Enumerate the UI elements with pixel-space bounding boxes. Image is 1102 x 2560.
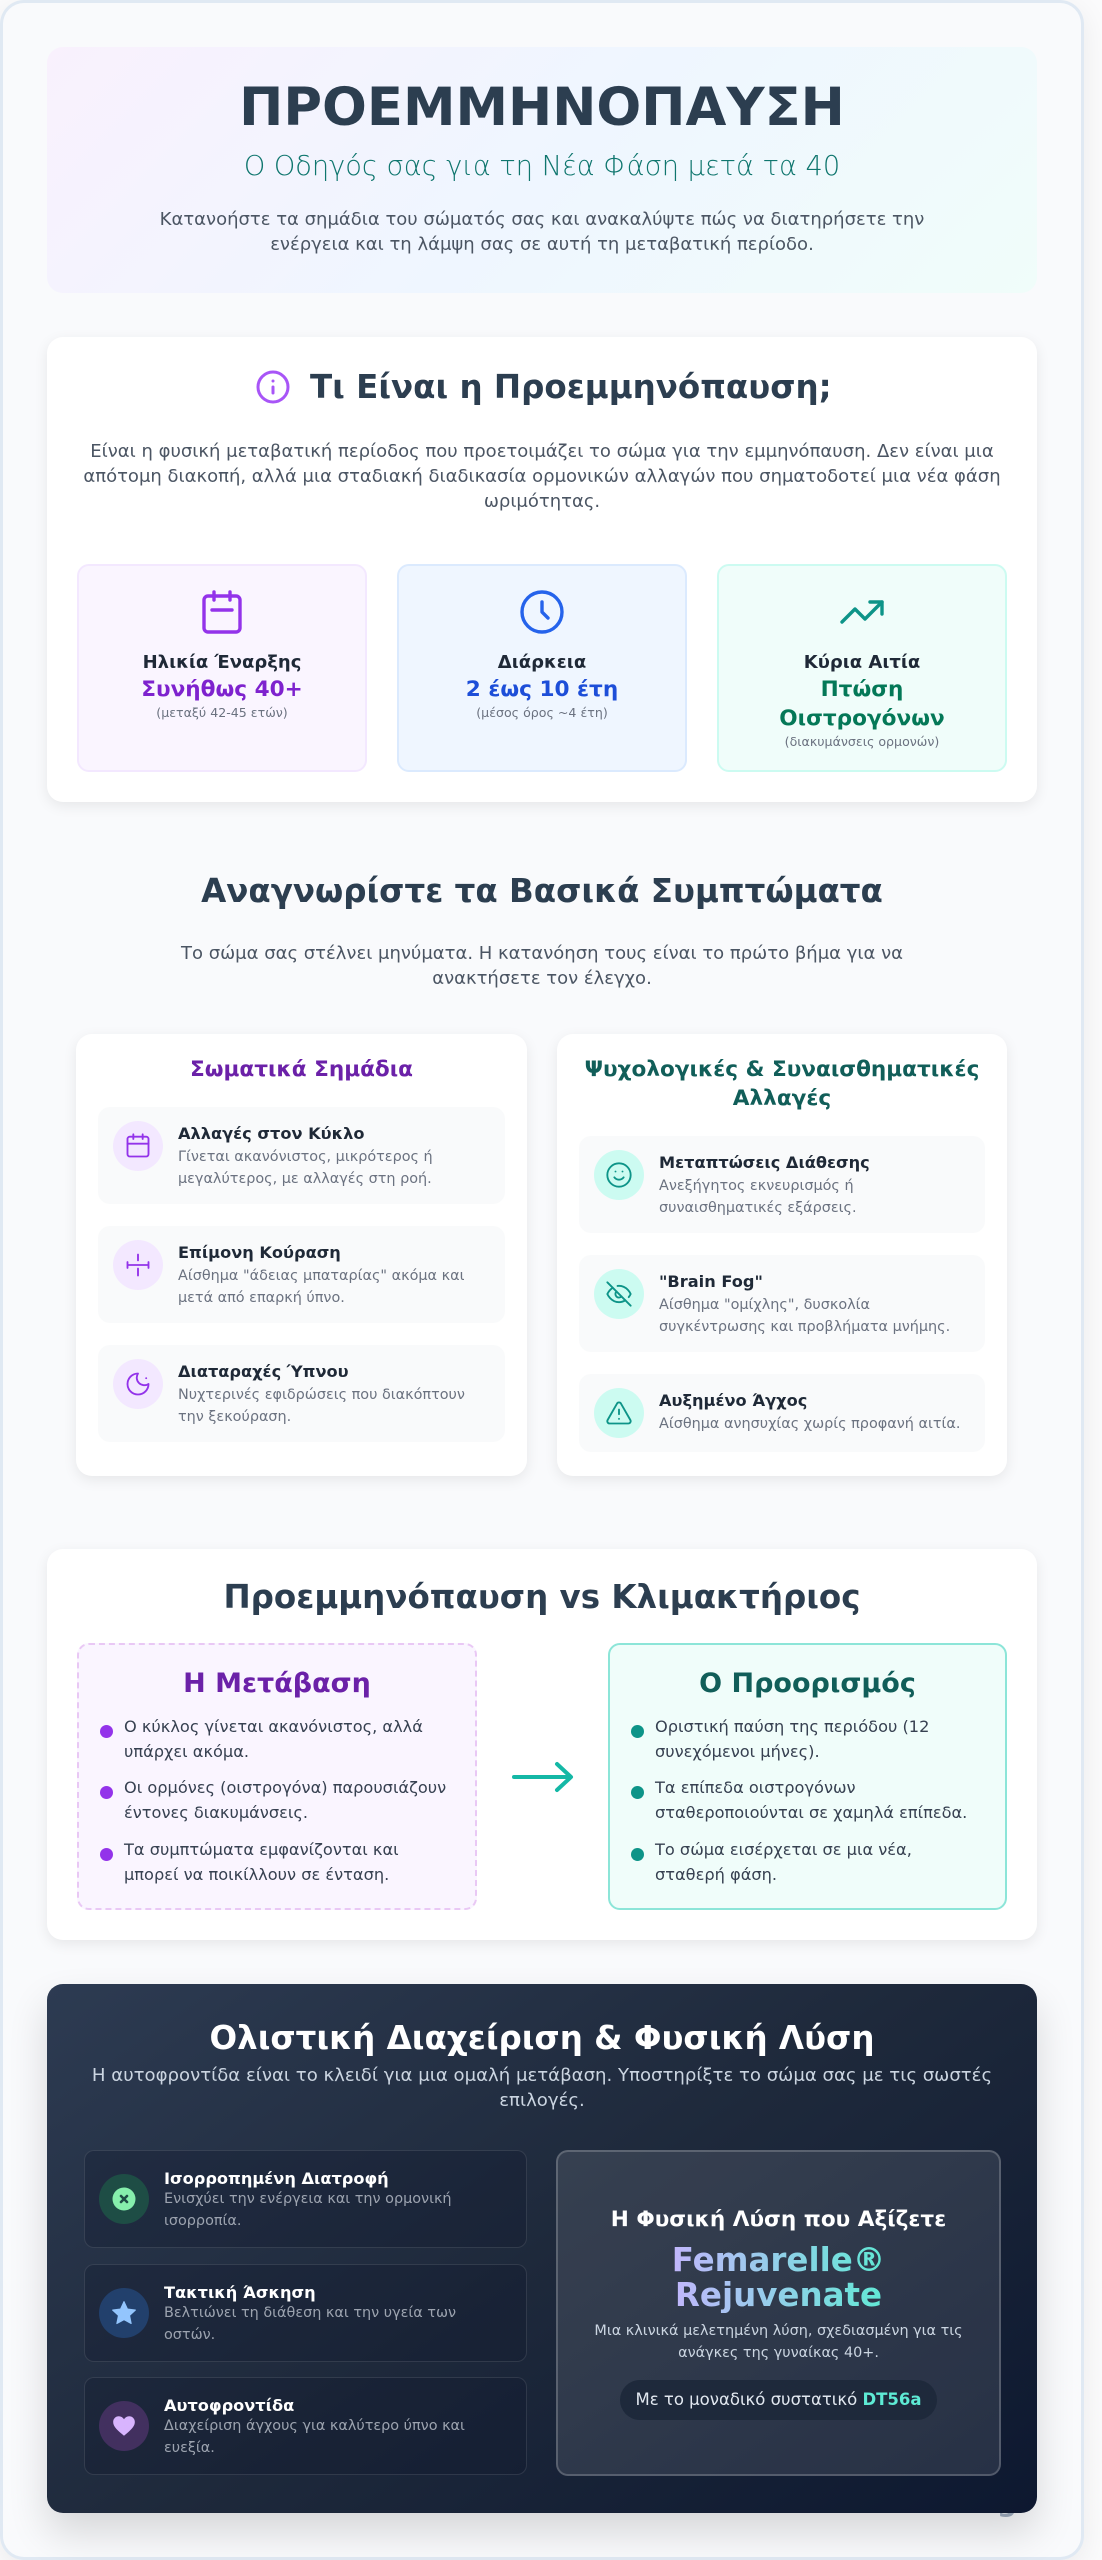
list text: Ο κύκλος γίνεται ακανόνιστος, αλλά (124, 1717, 423, 1736)
icon: heart (99, 2401, 149, 2451)
icon: clock (520, 590, 564, 634)
callout title: Η Φυσική Λύση που Αξίζετε (611, 2207, 946, 2232)
list text (655, 1717, 929, 1761)
bullet (100, 1848, 113, 1861)
intro text (160, 209, 924, 255)
text: μετά από επαρκή ύπνο. (178, 1290, 345, 1306)
text (164, 2418, 465, 2456)
panel: hero header (47, 47, 1037, 293)
icon: info (256, 370, 290, 404)
list text: έντονες διακυμάνσεις. (124, 1803, 308, 1822)
value: Οιστρογόνων (779, 706, 945, 731)
list text: Τα συμπτώματα εμφανίζονται και (124, 1840, 399, 1859)
list text: μπορεί να ποικίλλουν σε ένταση. (124, 1865, 389, 1884)
description (83, 441, 1001, 512)
text: ισορροπία. (164, 2213, 241, 2229)
symptoms intro (180, 943, 903, 989)
callout text: Μια κλινικά μελετημένη λύση, σχεδιασμένη για τις (594, 2323, 963, 2339)
symptom: cycle (98, 1107, 505, 1204)
intro: Η αυτοφροντίδα είναι το κλειδί για μια ομαλή μετάβαση. Υποστηρίξτε το σώμα σας με τις σωστές (92, 2065, 992, 2086)
title: Αλλαγές στον Κύκλο (178, 1124, 364, 1143)
icon: moon (113, 1359, 163, 1409)
intro (92, 2065, 992, 2111)
list text (124, 1840, 399, 1884)
list text (654, 1778, 967, 1822)
product name: Femarelle® (672, 2241, 885, 2279)
heading: Προεμμηνόπαυση vs Κλιμακτήριος (223, 1578, 861, 1616)
list text: σταθεροποιούνται σε χαμηλά επίπεδα. (655, 1803, 967, 1822)
icon: smile (594, 1150, 644, 1200)
box title: Η Μετάβαση (183, 1668, 371, 1699)
label: Διάρκεια (498, 652, 586, 673)
symptoms intro: Το σώμα σας στέλνει μηνύματα. Η κατανόηση τους είναι το πρώτο βήμα για να (181, 943, 903, 964)
text (164, 2305, 456, 2343)
list text: υπάρχει ακόμα. (124, 1742, 249, 1761)
title: Επίμονη Κούραση (178, 1243, 341, 1262)
stat card: main cause (717, 564, 1007, 772)
stat card: duration (397, 564, 687, 772)
text: ευεξία. (164, 2440, 215, 2456)
box title: Ο Προορισμός (699, 1668, 916, 1699)
text (178, 1149, 433, 1187)
intro text: ενέργεια και τη λάμψη σας σε αυτή τη μεταβατική περίοδο. (270, 234, 814, 255)
panel: holistic management (47, 1984, 1037, 2513)
value: 2 έως 10 έτη (466, 677, 618, 702)
callout text: ανάγκες της γυναίκας 40+. (678, 2345, 879, 2361)
title: ΠΡΟΕΜΜΗΝΟΠΑΥΣΗ (239, 77, 845, 138)
arrow (512, 1762, 574, 1792)
tip: self care (84, 2377, 527, 2475)
list text (124, 1717, 423, 1761)
list text (654, 1840, 912, 1884)
panel: comparison (47, 1549, 1037, 1940)
icon: eye off (594, 1269, 644, 1319)
text (659, 1178, 857, 1216)
list text: Το σώμα εισέρχεται σε μια νέα, (655, 1840, 912, 1859)
symptom: mood (579, 1136, 985, 1233)
description: Είναι η φυσική μεταβατική περίοδος που προετοιμάζει το σώμα για την εμμηνόπαυση. Δεν είναι μια (90, 441, 994, 462)
symptom: anxiety (579, 1374, 985, 1452)
callout: natural solution (556, 2150, 1001, 2476)
ingredient pill (620, 2380, 937, 2420)
note: (μεταξύ 42-45 ετών) (156, 705, 288, 720)
panel title: Σωματικά Σημάδια (190, 1057, 413, 1082)
heading: Ολιστική Διαχείριση & Φυσική Λύση (210, 2019, 874, 2057)
title: Ισορροπημένη Διατροφή (164, 2169, 389, 2188)
icon: battery (113, 1240, 163, 1290)
bullet (631, 1725, 644, 1738)
list text: Οι ορμόνες (οιστρογόνα) παρουσιάζουν (124, 1778, 446, 1797)
panel: psychological changes (557, 1034, 1007, 1476)
box: transition (77, 1643, 477, 1910)
label: Ηλικία Έναρξης (143, 652, 301, 673)
icon: warning (594, 1388, 644, 1438)
icon: star (99, 2288, 149, 2338)
text (164, 2191, 452, 2229)
panel: what is perimenopause (47, 337, 1037, 802)
heading: symptoms: Αναγνωρίστε τα Βασικά Συμπτώματα (201, 872, 883, 910)
title: Αυτοφροντίδα (164, 2396, 294, 2415)
title: "Brain Fog" (659, 1272, 763, 1291)
description: απότομη διακοπή, αλλά μια σταδιακή διαδικασία ορμονικών αλλαγών που σηματοδοτεί μια νέα φάση (83, 466, 1001, 487)
bullet (100, 1786, 113, 1799)
symptom: fatigue (98, 1226, 505, 1323)
text: Γίνεται ακανόνιστος, μικρότερος ή (178, 1149, 433, 1165)
text: συναισθηματικές εξάρσεις. (659, 1200, 857, 1216)
title: Τακτική Άσκηση (164, 2283, 316, 2302)
text: Νυχτερινές εφιδρώσεις που διακόπτουν (178, 1387, 465, 1403)
title: Διαταραχές Ύπνου (178, 1362, 349, 1381)
text: Αίσθημα "άδειας μπαταρίας" ακόμα και (178, 1268, 464, 1284)
value: Πτώση (821, 677, 903, 702)
text: Βελτιώνει τη διάθεση και την υγεία των (164, 2305, 456, 2321)
list text (124, 1778, 446, 1822)
note: (μέσος όρος ~4 έτη) (476, 705, 608, 720)
tip: exercise (84, 2264, 527, 2362)
heading: Τι Είναι η Προεμμηνόπαυση; (310, 368, 832, 406)
text: Αίσθημα ανησυχίας χωρίς προφανή αιτία. (659, 1416, 960, 1432)
symptom: sleep (98, 1345, 505, 1442)
panel: physical signs (76, 1034, 527, 1476)
text: την ξεκούραση. (178, 1409, 291, 1425)
stat card: onset age (77, 564, 367, 772)
text: συγκέντρωσης και προβλήματα μνήμης. (659, 1319, 950, 1335)
icon: calendar (113, 1121, 163, 1171)
tip: nutrition (84, 2150, 527, 2248)
subtitle: Ο Οδηγός σας για τη Νέα Φάση μετά τα 40 (244, 151, 840, 182)
icon: trend (840, 600, 884, 624)
product name: Rejuvenate (675, 2276, 882, 2314)
panel title: Αλλαγές (733, 1086, 831, 1111)
note: (διακυμάνσεις ορμονών) (785, 734, 939, 749)
product name (667, 2243, 890, 2313)
text: Αίσθημα "ομίχλης", δυσκολία (659, 1297, 870, 1313)
ingredient pill: Με το μοναδικό συστατικό DT56a (635, 2390, 922, 2409)
text: Ανεξήγητος εκνευρισμός ή (659, 1178, 854, 1194)
title: Μεταπτώσεις Διάθεσης (659, 1153, 870, 1172)
text: Ενισχύει την ενέργεια και την ορμονική (164, 2191, 452, 2207)
list text: σταθερή φάση. (655, 1865, 777, 1884)
text (178, 1268, 464, 1306)
text: μεγαλύτερος, με αλλαγές στη ροή. (178, 1171, 432, 1187)
panel title (585, 1057, 979, 1111)
intro text: Κατανοήστε τα σημάδια του σώματός σας και ανακαλύψτε πώς να διατηρήσετε την (160, 209, 924, 230)
icon: calendar (202, 590, 242, 634)
panel title: Ψυχολογικές & Συναισθηματικές (585, 1057, 979, 1082)
description: ωριμότητας. (484, 491, 600, 512)
list text: Τα επίπεδα οιστρογόνων (655, 1778, 856, 1797)
callout text (594, 2323, 963, 2361)
symptoms intro: ανακτήσετε τον έλεγχο. (432, 968, 652, 989)
bullet (100, 1725, 113, 1738)
list text: Οριστική παύση της περιόδου (12 (655, 1717, 929, 1736)
text: οστών. (164, 2327, 215, 2343)
partly hidden footer glyph: g (997, 2485, 1017, 2518)
value (779, 677, 945, 731)
bullet (631, 1786, 644, 1799)
value: Συνήθως 40+ (141, 677, 303, 702)
text (178, 1387, 465, 1425)
bullet (631, 1848, 644, 1861)
icon: nutrition (99, 2174, 149, 2224)
symptom: brain fog (579, 1255, 985, 1352)
intro: επιλογές. (499, 2090, 585, 2111)
label: Κύρια Αιτία (804, 652, 920, 673)
list text: συνεχόμενοι μήνες). (655, 1742, 820, 1761)
title: Αυξημένο Άγχος (659, 1391, 807, 1410)
text (659, 1297, 950, 1335)
text: Διαχείριση άγχους για καλύτερο ύπνο και (164, 2418, 465, 2434)
box: destination (608, 1643, 1007, 1910)
